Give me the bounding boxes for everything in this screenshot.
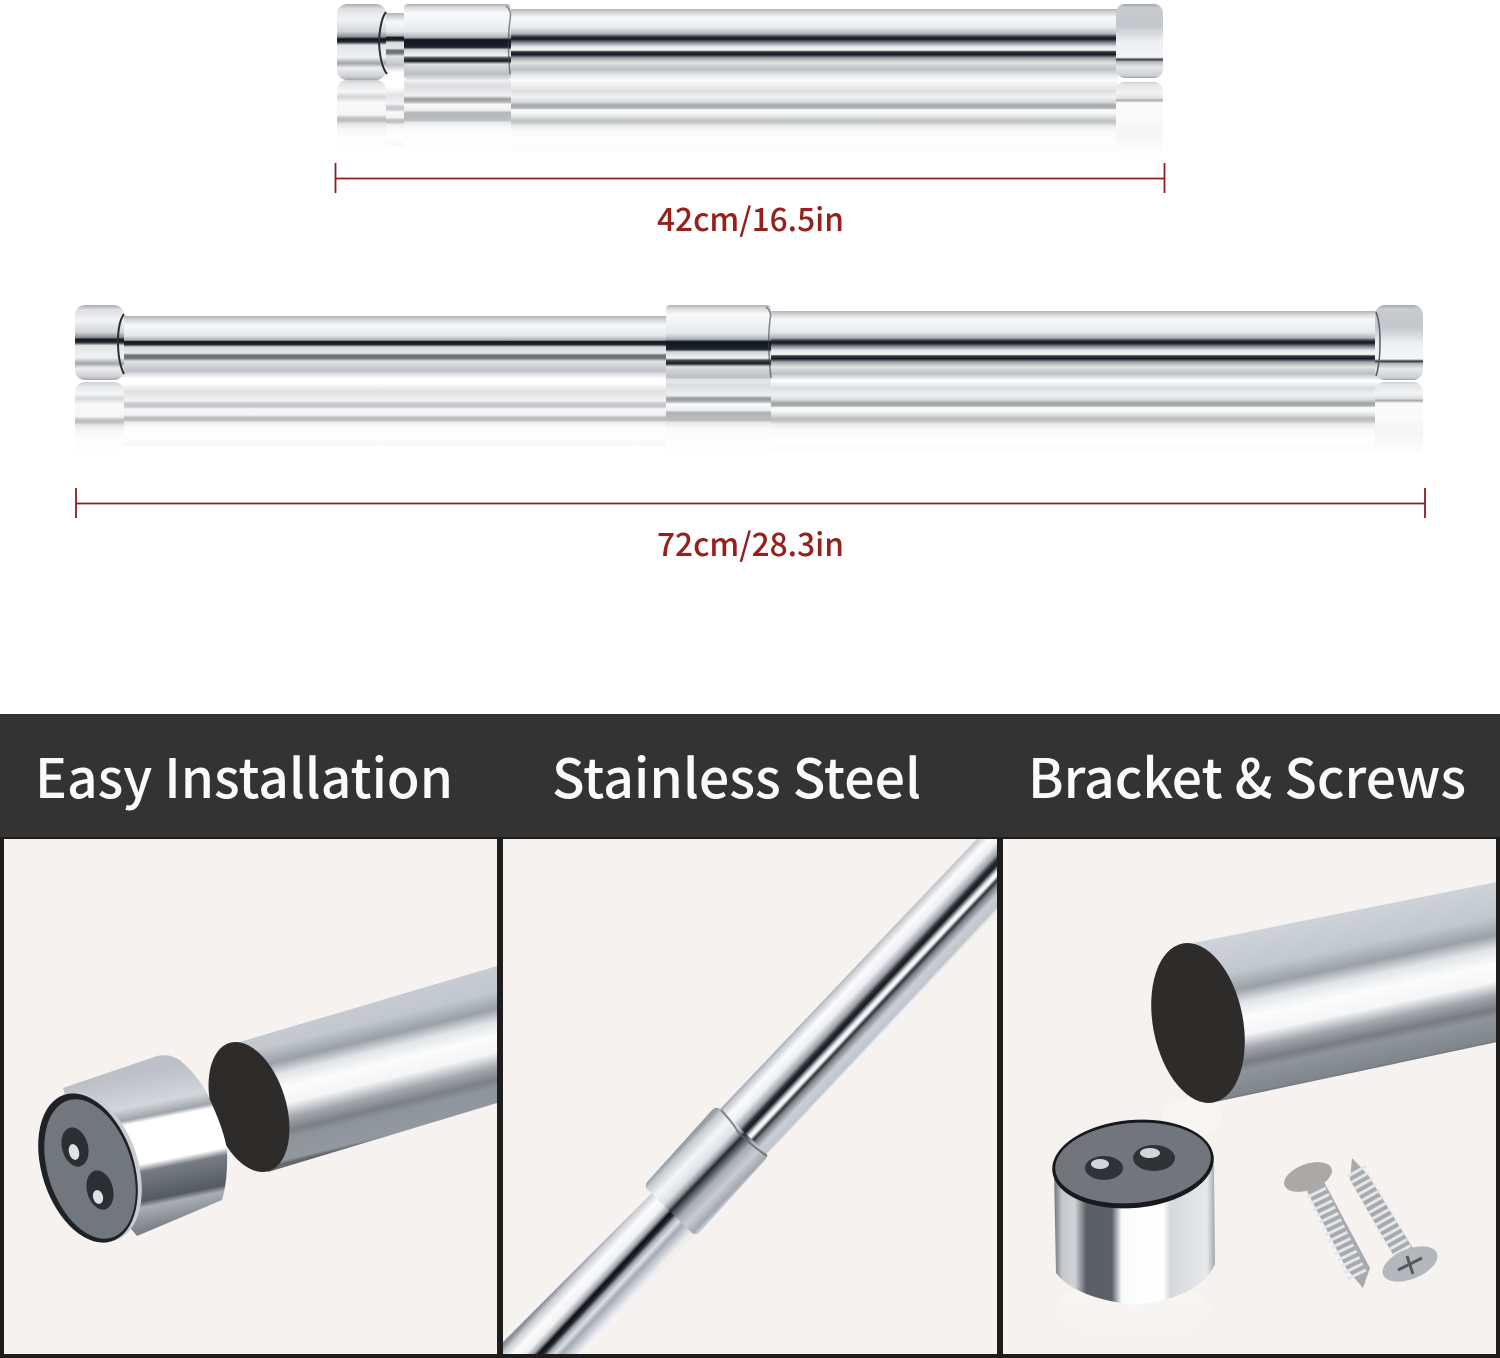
label 42cm: 42cm/16.5in — [657, 195, 844, 241]
short rod reflection — [330, 80, 1170, 160]
long rod reflection — [70, 379, 1430, 461]
heading: Easy Installation: Easy Installation — [35, 735, 453, 814]
end cap with two holes — [38, 1055, 228, 1243]
tube with dark end — [1138, 882, 1497, 1111]
dark header band and panel frame — [0, 714, 1500, 1358]
tube reflection — [1162, 1098, 1222, 1138]
long rod 72cm — [75, 305, 1423, 383]
angled telescopic rod — [503, 839, 997, 1354]
panel: easy installation — [4, 839, 497, 1354]
bracket with two holes — [1048, 1113, 1218, 1305]
short rod 42cm — [337, 4, 1163, 80]
heading: Bracket & Screws: Bracket & Screws — [1028, 735, 1466, 814]
screw 2 — [1350, 1158, 1443, 1289]
tube with dark end — [194, 966, 497, 1182]
panel: bracket and screws — [1003, 839, 1497, 1354]
bracket reflection — [1055, 1280, 1211, 1340]
dimension line 42cm — [335, 163, 1165, 193]
screw 1 — [1280, 1156, 1370, 1288]
heading: Stainless Steel: Stainless Steel — [552, 735, 921, 814]
label 72cm: 72cm/28.3in — [657, 520, 844, 566]
dimension line 72cm — [76, 488, 1425, 518]
panel: stainless steel — [503, 839, 997, 1354]
